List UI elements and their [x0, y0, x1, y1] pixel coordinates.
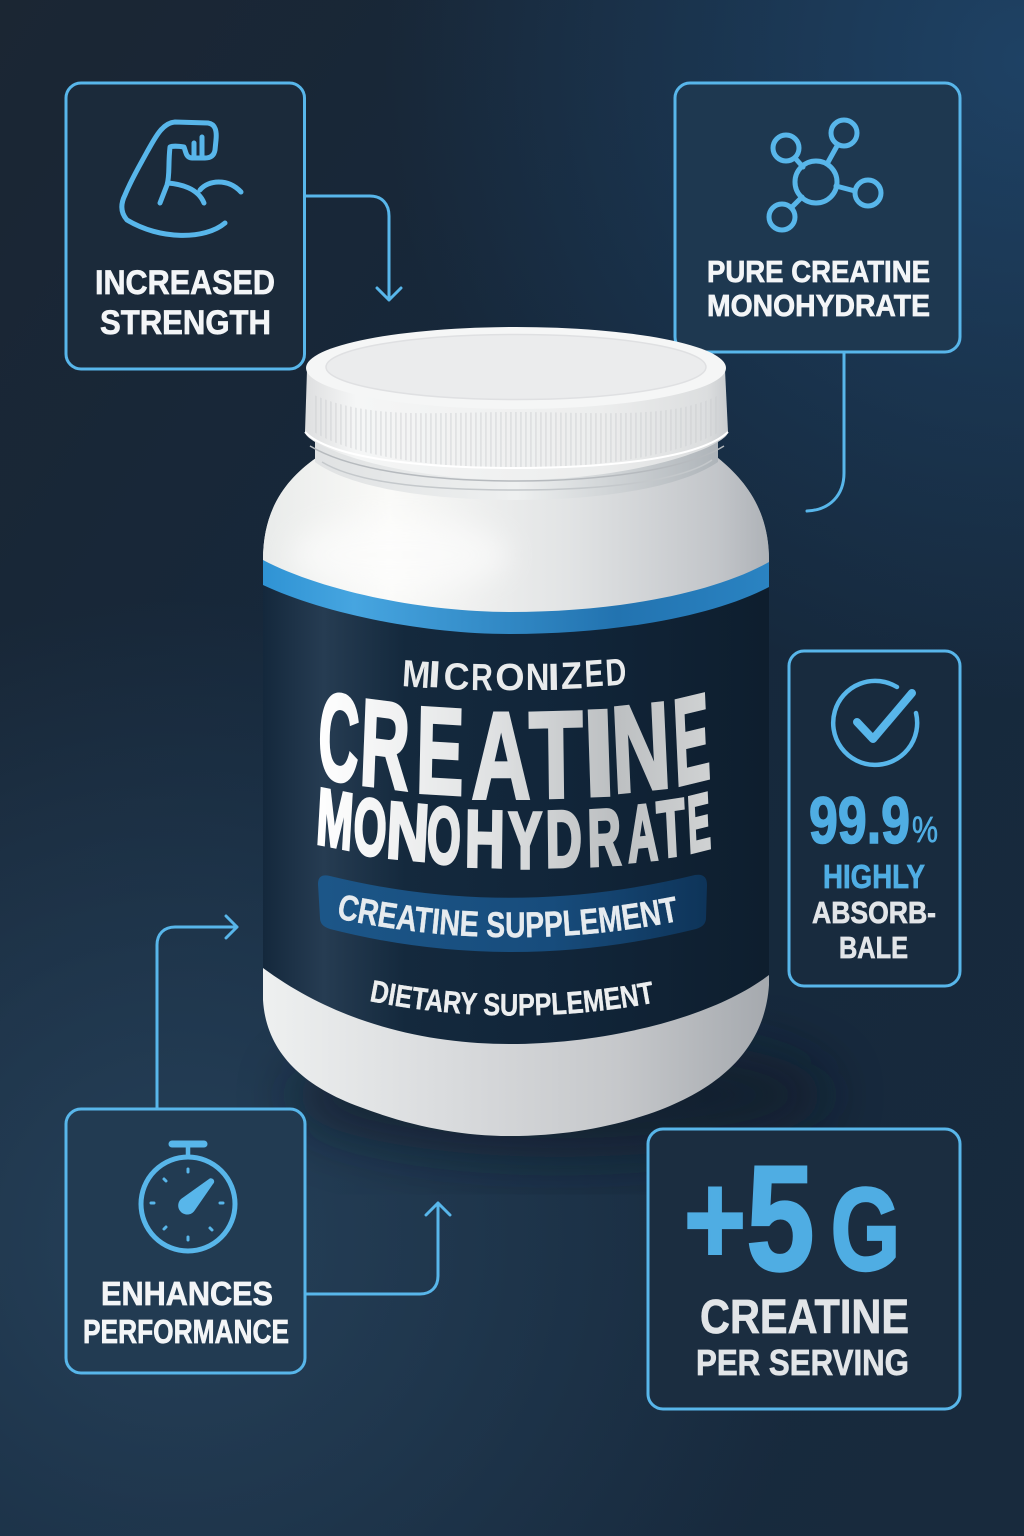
- panel: purity and absorption: [789, 651, 960, 986]
- stat: plus 5 g: 5: [746, 1135, 815, 1303]
- label heading: creatine: E: [415, 682, 467, 821]
- panel: increased strength: [66, 83, 304, 369]
- label pill: [318, 875, 707, 952]
- label heading: micronized: N: [526, 657, 549, 699]
- label heading: micronized: Z: [560, 655, 583, 698]
- label heading: micronized: M: [401, 653, 432, 697]
- label: highly absorbable: [812, 858, 936, 965]
- lid top: [306, 327, 726, 409]
- arrow: performance to bottle: [157, 916, 237, 1108]
- label heading: micronized: I: [427, 654, 442, 697]
- label: pure creatine monohydrate: PURE CREATINE: [707, 254, 930, 289]
- label heading: creatine: A: [472, 688, 531, 825]
- icon: check circle: [833, 681, 917, 765]
- label heading: creatine: T: [528, 687, 584, 825]
- label: highly absorbable: ABSORB-: [812, 895, 936, 930]
- label heading: creatine: N: [606, 679, 674, 820]
- label heading: micronized: I: [547, 657, 560, 699]
- label: increased strength: STRENGTH: [100, 304, 271, 342]
- icon: flexed arm: [122, 122, 241, 235]
- label heading: monohydrate: E: [681, 779, 713, 870]
- label heading: micronized: D: [604, 652, 628, 695]
- bottle shadow: [290, 1033, 830, 1157]
- blue label band: [263, 560, 769, 640]
- stat: 99.9 percent: %: [912, 809, 938, 850]
- icon: molecule: [769, 120, 881, 230]
- label heading: creatine: R: [357, 674, 416, 814]
- label heading: monohydrate: M: [314, 771, 359, 864]
- label: creatine per serving: [696, 1291, 909, 1383]
- label heading: micronized: O: [495, 657, 525, 699]
- stat: plus 5 g: +: [684, 1147, 746, 1292]
- label heading: monohydrate: N: [384, 785, 433, 877]
- stat: 99.9 percent: 99.9: [809, 783, 910, 857]
- label heading: micronized: E: [583, 653, 604, 696]
- connector: purity to bottle: [807, 352, 844, 511]
- lid ribs: [314, 395, 719, 468]
- label: pure creatine monohydrate: MONOHYDRATE: [707, 288, 930, 323]
- lid skirt: [305, 370, 728, 480]
- label: highly absorbable: BALE: [839, 930, 908, 965]
- label: highly absorbable: HIGHLY: [823, 858, 925, 895]
- label heading: monohydrate: O: [351, 780, 391, 872]
- label heading: creatine: I: [581, 685, 617, 823]
- label: creatine per serving: CREATINE: [700, 1291, 909, 1344]
- bottle shoulder: [263, 458, 769, 640]
- pill text: CREATINE SUPPLEMENT: [339, 895, 676, 938]
- label heading: monohydrate: H: [464, 794, 506, 884]
- label footer text: DIETARY SUPPLEMENT: [370, 980, 652, 1016]
- panel: enhances performance: [66, 1109, 305, 1373]
- label heading: creatine: C: [315, 666, 367, 806]
- label heading: monohydrate: D: [545, 794, 582, 884]
- arrow: strength to bottle: [305, 196, 401, 300]
- label: enhances performance: ENHANCES: [101, 1275, 273, 1312]
- product bottle: [263, 327, 769, 1136]
- label heading: creatine: E: [664, 673, 714, 813]
- label heading: monohydrate: A: [625, 789, 659, 879]
- label heading: micronized: R: [471, 657, 493, 699]
- icon: stopwatch: [141, 1144, 235, 1251]
- label: pure creatine monohydrate: [707, 254, 930, 323]
- label: increased strength: INCREASED: [95, 264, 275, 302]
- label: creatine per serving: PER SERVING: [696, 1342, 909, 1383]
- bottle body: [263, 458, 769, 1136]
- label: enhances performance: PERFORMANCE: [83, 1313, 289, 1350]
- stat: plus 5 g: G: [831, 1163, 900, 1295]
- panel: 5g per serving: [648, 1129, 960, 1409]
- label heading: monohydrate: Y: [508, 796, 542, 885]
- label: enhances performance: [83, 1275, 289, 1350]
- bottle neck: [315, 440, 718, 500]
- panel: pure creatine monohydrate: [675, 83, 960, 352]
- label heading: micronized: C: [443, 656, 470, 699]
- label heading: monohydrate: R: [586, 793, 622, 883]
- label heading: monohydrate: T: [652, 784, 688, 875]
- dark label: [263, 585, 769, 1044]
- arrow: performance to bottle base: [305, 1203, 450, 1294]
- label: increased strength: [95, 264, 275, 342]
- label heading: monohydrate: O: [426, 790, 463, 880]
- stat: plus 5 g: [684, 1135, 900, 1303]
